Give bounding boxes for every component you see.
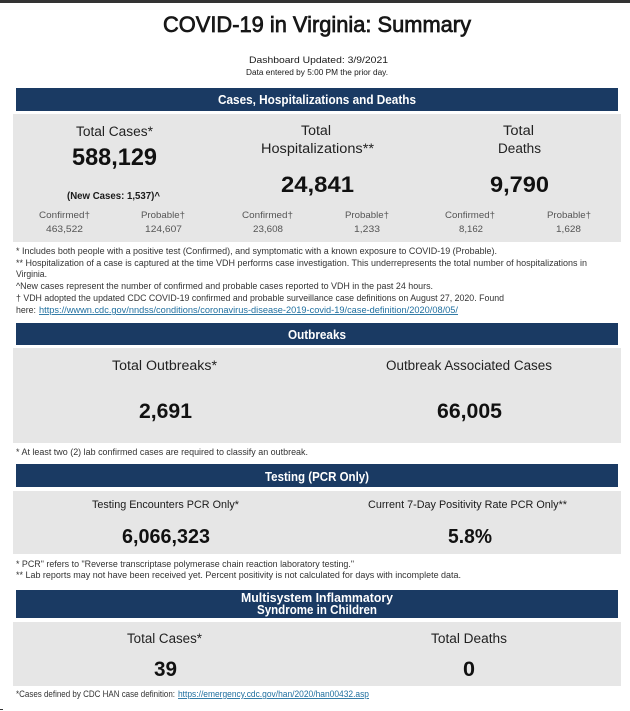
total cases: (New Cases: 1,537)^ — [67, 191, 160, 202]
footnotes: testing — [16, 559, 461, 580]
footnote: case definition: https://emergency.cdc.gov/han/2020/han00432.asp — [178, 689, 369, 699]
footnotes: cases: ^New cases represent the number of confirmed and probable cases reported to VDH in the past 24 hours. — [16, 281, 433, 291]
total hospitalizations: 23,608 — [253, 224, 283, 235]
panel: testing — [13, 464, 621, 580]
total hospitalizations — [242, 123, 389, 235]
stats panel: 6,066,323 — [122, 526, 210, 548]
total deaths: Total — [503, 123, 534, 138]
banner: multisystem inflammatory syndrome — [16, 590, 618, 618]
total deaths: Confirmed† — [445, 210, 495, 221]
stats panel: Total Deaths — [431, 631, 507, 646]
banner: cases, hospitalizations and deaths: Cases, Hospitalizations and Deaths — [218, 93, 416, 107]
footnotes: cases: ** Hospitalization of a case is captured at the time VDH performs case investigation. This underrepresents the total number of hospitalizations in — [16, 258, 587, 268]
stats panel: 66,005 — [437, 400, 502, 423]
banner: testing — [16, 464, 618, 487]
total cases: 588,129 — [72, 144, 157, 171]
total hospitalizations: Total — [301, 123, 331, 138]
total cases: Probable† — [141, 210, 185, 221]
total hospitalizations: Hospitalizations** — [261, 141, 375, 156]
footnotes: cases: here: — [16, 305, 36, 315]
stats panel — [13, 114, 621, 242]
total deaths: Probable† — [547, 210, 591, 221]
total cases — [39, 124, 185, 235]
stats panel: Current 7-Day Positivity Rate PCR Only** — [368, 499, 568, 511]
footnotes: cases — [16, 246, 587, 315]
stats panel — [13, 491, 621, 554]
stats panel: Total Cases* — [127, 631, 203, 646]
total deaths — [445, 123, 591, 235]
banner: cases, hospitalizations and deaths — [16, 88, 618, 111]
stats panel: Testing Encounters PCR Only* — [92, 499, 240, 511]
total deaths: Deaths — [498, 141, 541, 156]
footnote: outbreaks: * At least two (2) lab confirmed cases are required to classify an outbreak. — [16, 447, 308, 457]
footnotes: testing: * PCR" refers to "Reverse transcriptase polymerase chain reaction laboratory testing." — [16, 559, 354, 569]
stats panel: 5.8% — [448, 526, 492, 548]
banner: multisystem inflammatory syndrome: Syndrome in Children — [257, 603, 377, 617]
total deaths: 9,790 — [490, 172, 549, 197]
total cases: Total Cases* — [76, 124, 154, 139]
stats panel — [13, 622, 621, 686]
footnote: case definition: *Cases defined by CDC HAN case definition: — [16, 689, 175, 699]
total hospitalizations: Confirmed† — [242, 210, 293, 221]
dashboard update text: Dashboard Updated: 3/9/2021 — [249, 55, 388, 66]
banner: multisystem inflammatory syndrome: Multisystem Inflammatory — [241, 591, 393, 605]
total hospitalizations: Probable† — [345, 210, 389, 221]
stats panel: Total Outbreaks* — [112, 358, 218, 373]
title: COVID-19 in Virginia: Summary — [163, 12, 471, 37]
stats panel: 39 — [154, 658, 177, 681]
footnotes: testing: ** Lab reports may not have been received yet. Percent positivity is not calculated for days with incomplete data. — [16, 570, 461, 580]
banner: testing: Testing (PCR Only) — [265, 470, 369, 484]
panel: cases, hospitalizations and deaths — [13, 88, 621, 315]
stats panel — [13, 348, 621, 443]
stats panel: Outbreak Associated Cases — [386, 358, 552, 373]
banner: outbreaks: Outbreaks — [288, 328, 346, 342]
footnote: case definition — [16, 689, 369, 699]
banner: outbreaks — [16, 323, 618, 345]
dashboard update text — [246, 55, 388, 77]
total deaths: 1,628 — [556, 224, 581, 235]
total deaths: 8,162 — [459, 224, 483, 235]
stats panel: 0 — [463, 658, 475, 681]
total cases: 463,522 — [46, 224, 83, 235]
total hospitalizations: 1,233 — [354, 224, 380, 235]
total cases: 124,607 — [145, 224, 182, 235]
footnotes: cases: * Includes both people with a positive test (Confirmed), and symptomatic with a known exposure to COVID-19 (Probable). — [16, 246, 497, 256]
total hospitalizations: 24,841 — [281, 172, 354, 197]
panel: outbreaks — [13, 323, 621, 457]
footnotes: cases: https://wwwn.cdc.gov/nndss/conditions/coronavirus-disease-2019-covid-19/case-definition/2020/08/05/ — [39, 305, 459, 315]
panel: multisystem inflammatory syndrome — [13, 590, 621, 699]
dashboard update text: Data entered by 5:00 PM the prior day. — [246, 68, 388, 77]
footnotes: cases: Virginia. — [16, 269, 47, 279]
footnotes: cases: † VDH adopted the updated CDC COVID-19 confirmed and probable surveillance case definitions on August 27, 2020. Found — [16, 293, 504, 303]
total cases: Confirmed† — [39, 210, 90, 221]
stats panel: 2,691 — [139, 400, 192, 423]
